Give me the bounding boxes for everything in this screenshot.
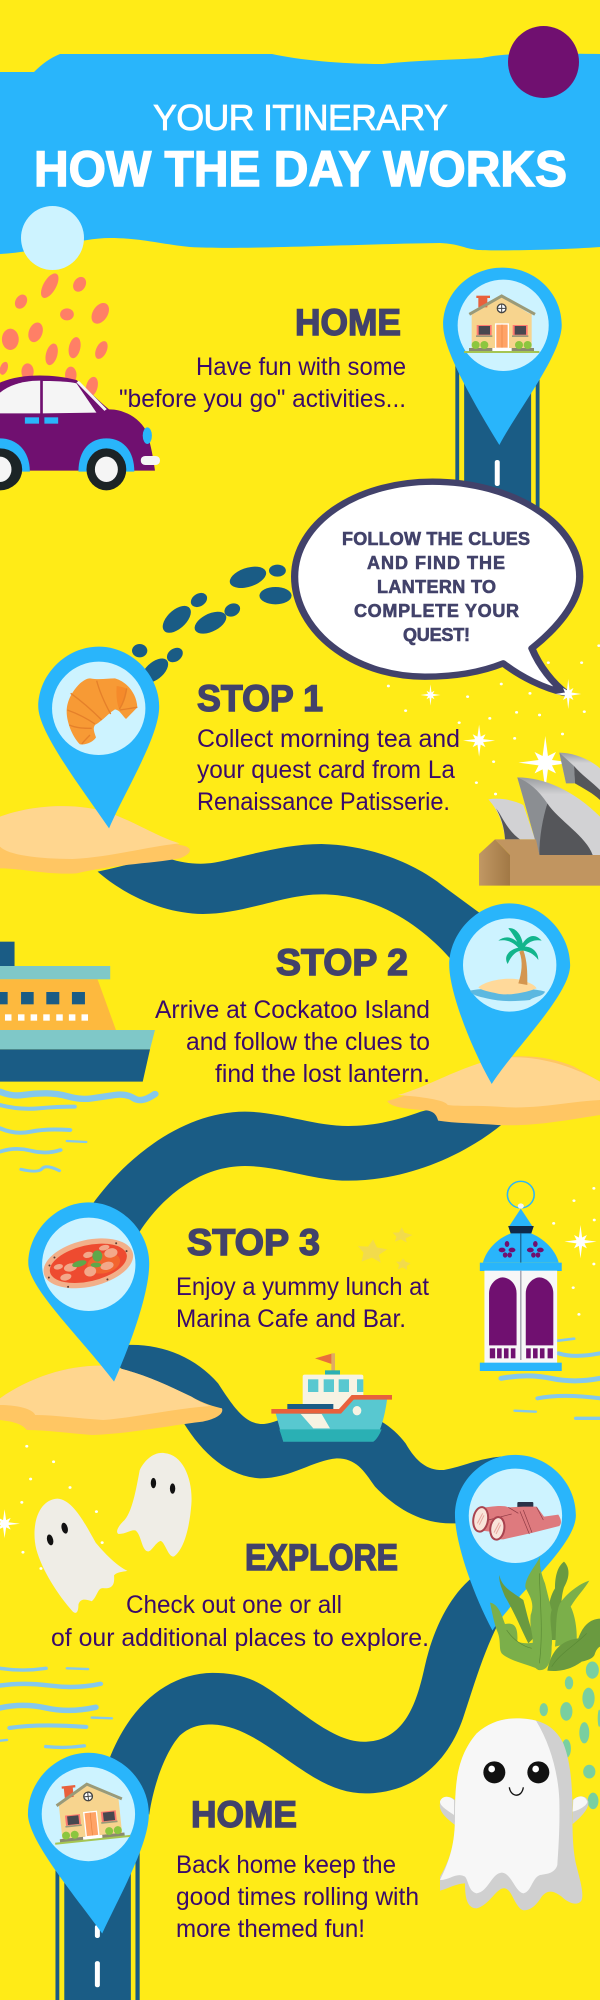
icon: pizza xyxy=(39,1230,138,1296)
icon: croissant xyxy=(67,678,137,744)
text: stop 2 description: and follow the clues to xyxy=(186,1028,430,1056)
icon: small ghost left xyxy=(34,1499,127,1613)
speech bubble text: LANTERN TO xyxy=(377,577,496,597)
dots and sparkle left of ghosts xyxy=(0,1445,104,1570)
road: stop 2 to stop 3 xyxy=(92,1107,503,1232)
speech bubble text: AND FIND THE xyxy=(367,553,505,573)
road: stop 1 to stop 2 xyxy=(98,844,480,960)
island: stop 1 xyxy=(0,806,190,874)
waves: left above home xyxy=(0,1668,112,1747)
icon: boat xyxy=(271,1353,392,1442)
text: explore description: Check out one or all xyxy=(126,1591,342,1619)
text: final home description: Back home keep the xyxy=(176,1851,396,1879)
heading: home: HOME xyxy=(295,302,401,343)
text: stop 2 description: find the lost lantern. xyxy=(215,1060,430,1088)
speech bubble text xyxy=(342,529,530,645)
road: start of route xyxy=(455,363,540,513)
road: stop 3 to explore xyxy=(115,1345,517,1523)
header banner xyxy=(0,54,600,254)
pin: home xyxy=(443,268,562,445)
decorative purple circle xyxy=(508,26,579,98)
text: stop 3 description: Enjoy a yummy lunch at xyxy=(176,1273,429,1301)
pin: explore xyxy=(455,1455,576,1630)
text: home description: "before you go" activities... xyxy=(119,385,406,413)
faded stars xyxy=(358,1227,412,1270)
pin: stop 2 xyxy=(449,903,570,1084)
text: stop 3 heading: STOP 3 xyxy=(187,1222,320,1263)
text: stop 2 description: Arrive at Cockatoo Island xyxy=(155,996,430,1024)
pin: stop 3 xyxy=(28,1202,149,1382)
road: end of route xyxy=(55,1842,140,2000)
orange confetti dots xyxy=(0,271,113,397)
island: stop 2 xyxy=(387,1056,600,1125)
icon: ferry xyxy=(0,942,155,1082)
text: home description: Have fun with some xyxy=(196,353,406,381)
speech bubble text: QUEST! xyxy=(403,625,470,645)
island: stop 3 xyxy=(0,1366,222,1435)
waves: right of lantern xyxy=(501,1339,600,1418)
pin: final home xyxy=(28,1753,149,1934)
text: stop 3 description xyxy=(176,1273,429,1333)
text: stop 1 description: Collect morning tea and xyxy=(197,725,460,753)
text: final home description xyxy=(176,1851,419,1943)
text: final home description: more themed fun! xyxy=(176,1915,365,1943)
green confetti dots xyxy=(540,1661,600,1809)
text: explore description xyxy=(51,1591,429,1652)
icon: purple car xyxy=(0,376,160,490)
text: stop 1 description xyxy=(197,725,460,816)
title: how the day works: HOW THE DAY WORKS xyxy=(34,141,567,197)
icon: house tilted xyxy=(49,1780,130,1845)
text: stop 1 description: Renaissance Patisserie. xyxy=(197,788,450,816)
footprints xyxy=(129,562,292,687)
text: stop 2 heading: STOP 2 xyxy=(276,942,408,983)
pin: stop 1 xyxy=(38,647,159,828)
text: final home description: good times rolling with xyxy=(176,1883,419,1911)
sparkle and dots near lantern xyxy=(552,1187,597,1316)
text: explore heading: EXPLORE xyxy=(245,1537,398,1578)
waves: left of stop 2 xyxy=(0,1092,155,1171)
icon: binoculars xyxy=(472,1502,561,1541)
icon: lantern xyxy=(480,1181,562,1371)
text: stop 3 description: Marina Cafe and Bar. xyxy=(176,1305,406,1333)
speech bubble text: FOLLOW THE CLUES xyxy=(342,529,530,549)
icon: big ghost xyxy=(440,1718,588,1910)
icon: seaweed xyxy=(490,1557,600,1671)
title: your itinerary: YOUR ITINERARY xyxy=(153,97,448,138)
decorative pale circle xyxy=(21,206,84,270)
text: stop 1 heading: STOP 1 xyxy=(197,678,323,719)
speech bubble xyxy=(295,482,580,693)
icon: small ghost right xyxy=(117,1453,192,1557)
icon: sydney opera house xyxy=(479,753,600,886)
text: final home heading: HOME xyxy=(191,1794,297,1835)
road: explore to home xyxy=(109,1577,497,1815)
speech bubble text: COMPLETE YOUR xyxy=(354,601,519,621)
text: stop 2 description xyxy=(155,996,430,1088)
icon: house xyxy=(464,296,539,353)
text: explore description: of our additional places to explore. xyxy=(51,1624,429,1652)
sparkles near opera house xyxy=(387,644,600,795)
icon: palm island xyxy=(470,928,545,1001)
text: stop 1 description: your quest card from La xyxy=(197,756,455,784)
text: home description xyxy=(119,353,406,413)
